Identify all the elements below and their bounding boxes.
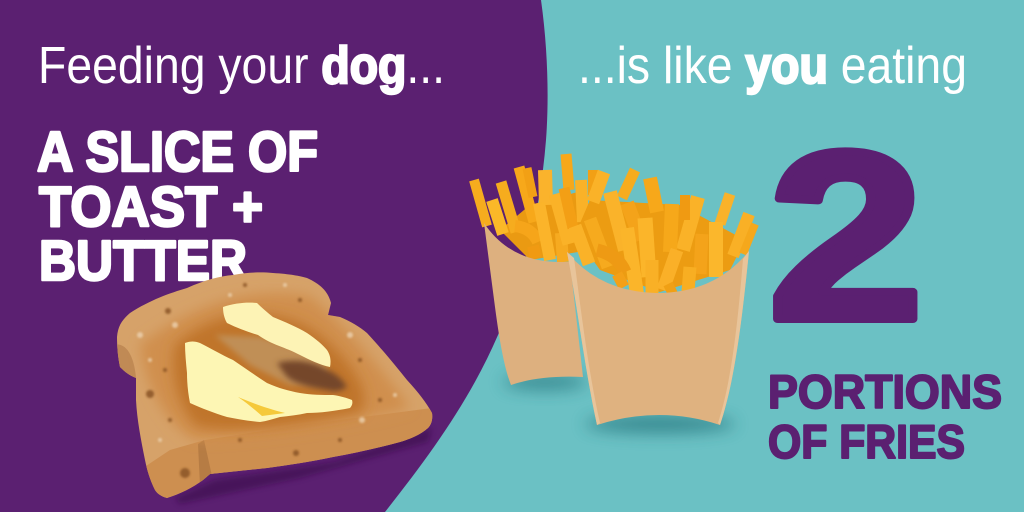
butter: fold [238, 397, 285, 416]
text block: portions of fries: OF FRIES [768, 415, 965, 468]
toast: toasted surface [140, 293, 410, 440]
toast: grain speckles [146, 283, 382, 478]
back box [484, 223, 583, 385]
illustration: toast with butter [112, 272, 440, 505]
text block: a slice of toast + butter [37, 120, 318, 293]
purple curved panel [0, 0, 548, 512]
text block: a slice of toast + butter: TOAST + [39, 175, 263, 239]
burnt patch [277, 361, 347, 391]
heading: is like you eating: ...is like you eating [578, 37, 967, 95]
butter smear [215, 335, 328, 385]
shadows [503, 374, 587, 390]
heading: Feeding your dog: Feeding your dog... [38, 37, 445, 95]
back fries [474, 154, 590, 262]
text block: a slice of toast + butter: BUTTER [39, 229, 247, 293]
front box [567, 251, 749, 425]
text block: portions of fries: PORTIONS [768, 365, 1002, 418]
toast: crust side [146, 408, 432, 498]
text block: portions of fries [768, 365, 1002, 468]
butter: lower pat [185, 342, 352, 422]
front fries [575, 170, 755, 296]
illustration: fries portions [474, 154, 755, 433]
butter: upper pat [223, 303, 331, 367]
text block: a slice of toast + butter: A SLICE OF [37, 120, 318, 184]
big number 2: 2 [768, 102, 924, 370]
